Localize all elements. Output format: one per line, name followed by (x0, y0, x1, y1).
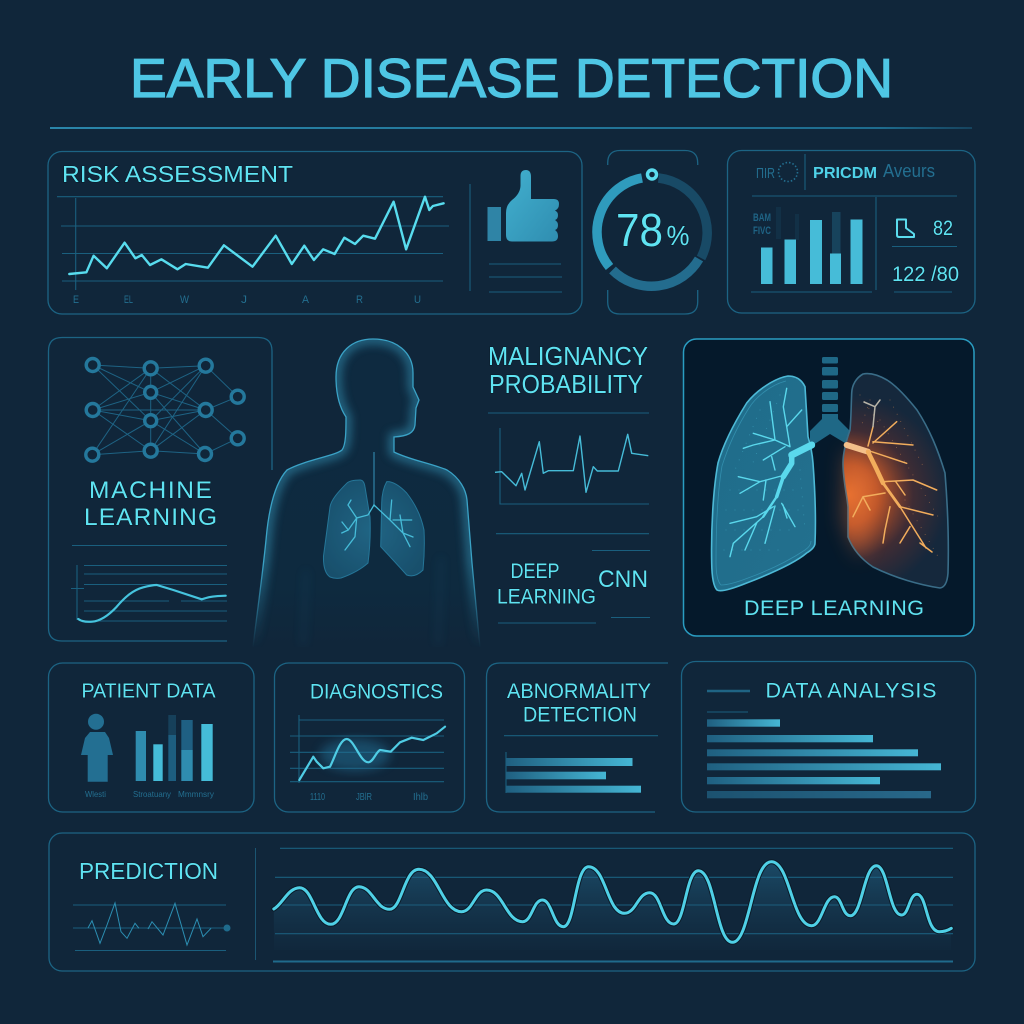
heading: abnormality detection: DETECTION (523, 704, 637, 727)
text block: deep learning cnn (496, 534, 650, 623)
heading: data analysis: DATA ANALYSIS (766, 678, 936, 702)
heading: machine learning: MACHINE (89, 477, 212, 504)
text block: malignancy probability: MALIGNANCY (488, 343, 648, 371)
line chart: diagnostics (290, 715, 445, 803)
trachea and bronchi (810, 357, 850, 447)
gauge ring (597, 170, 707, 286)
text block: deep learning cnn: DEEP (510, 560, 560, 583)
bar chart: data analysis (707, 719, 941, 798)
heading: machine learning: LEARNING (84, 504, 217, 531)
vitals header (756, 161, 935, 182)
panel: patient data (48, 663, 254, 812)
axis labels: patient data: Stroatuany (133, 789, 172, 799)
line chart: diagnostics: JBlR (356, 792, 372, 803)
neural network diagram (86, 358, 244, 461)
line chart: risk trend: R (356, 294, 363, 306)
text block: deep learning cnn: CNN (598, 566, 648, 593)
text block: malignancy probability: PROBABILITY (489, 371, 643, 399)
heading: deep learning: DEEP LEARNING (744, 596, 924, 620)
panel: 78% gauge: % (666, 220, 690, 251)
left lung (712, 376, 815, 591)
line chart: risk trend: EL (124, 294, 133, 306)
heading: abnormality detection: ABNORMALITY (507, 680, 651, 703)
heading: prediction: PREDICTION (79, 858, 218, 884)
title: EARLY DISEASE DETECTION (130, 47, 893, 109)
human body silhouette with lungs (253, 339, 480, 647)
icon: thumbs up (488, 170, 559, 242)
line chart: diagnostics: Ihlb (413, 792, 428, 803)
heading: patient data: PATIENT DATA (82, 680, 216, 702)
line chart: risk trend: E (73, 294, 79, 306)
small lungs (323, 452, 424, 578)
vitals header: PRICDM (813, 165, 877, 182)
axis labels: patient data: Mmmnsry (178, 789, 215, 799)
panel: vitals (728, 150, 975, 313)
panel: abnormality detection (486, 663, 668, 812)
bar chart: vitals: BAM (753, 212, 771, 224)
line chart: risk trend: A (302, 294, 310, 306)
heading: diagnostics: DIAGNOSTICS (310, 680, 443, 704)
text block: deep learning cnn: LEARNING (497, 585, 596, 608)
bar chart: vitals (753, 207, 862, 284)
left bronchial tree (730, 388, 812, 557)
icon: vitals shoe (897, 220, 914, 237)
bar chart: abnormality (506, 758, 641, 793)
panel: prediction (49, 833, 975, 971)
small waveform chart (73, 903, 230, 950)
line chart: risk trend: J (241, 294, 247, 306)
line chart: machine learning (71, 565, 227, 622)
vitals header: ΠIR (756, 165, 775, 182)
vitals header: Aveurs (883, 161, 935, 181)
heading: machine learning (84, 477, 217, 531)
heading: risk assessment: RISK ASSESSMENT (62, 161, 293, 187)
heading: abnormality detection (507, 680, 651, 727)
right lung (843, 374, 948, 588)
line chart: malignancy (495, 428, 649, 504)
line chart: risk trend (57, 197, 449, 306)
gauge value: 78 (616, 204, 663, 256)
right bronchial tree (847, 400, 937, 552)
line chart: diagnostics: 1110 (310, 792, 325, 803)
line chart: risk trend: W (180, 294, 190, 306)
panel: risk assessment (48, 152, 582, 314)
text block: malignancy probability (488, 343, 649, 504)
large forecast waveform (273, 848, 953, 962)
panel: machine learning (48, 338, 272, 641)
axis labels: patient data (85, 789, 215, 799)
pulse value: 82 (933, 217, 953, 240)
panel: diagnostics (274, 663, 464, 812)
panel: 78% gauge (597, 150, 707, 314)
panel: deep learning lungs (684, 339, 974, 636)
bar chart: vitals: FIVC (753, 225, 771, 237)
bar chart: patient data (136, 715, 213, 781)
icon: person (81, 714, 113, 782)
line chart: risk trend: U (414, 294, 421, 306)
blood pressure value: 122 /80 (892, 263, 959, 286)
panel: data analysis (682, 662, 976, 812)
axis labels: patient data: Wlesti (85, 789, 106, 799)
